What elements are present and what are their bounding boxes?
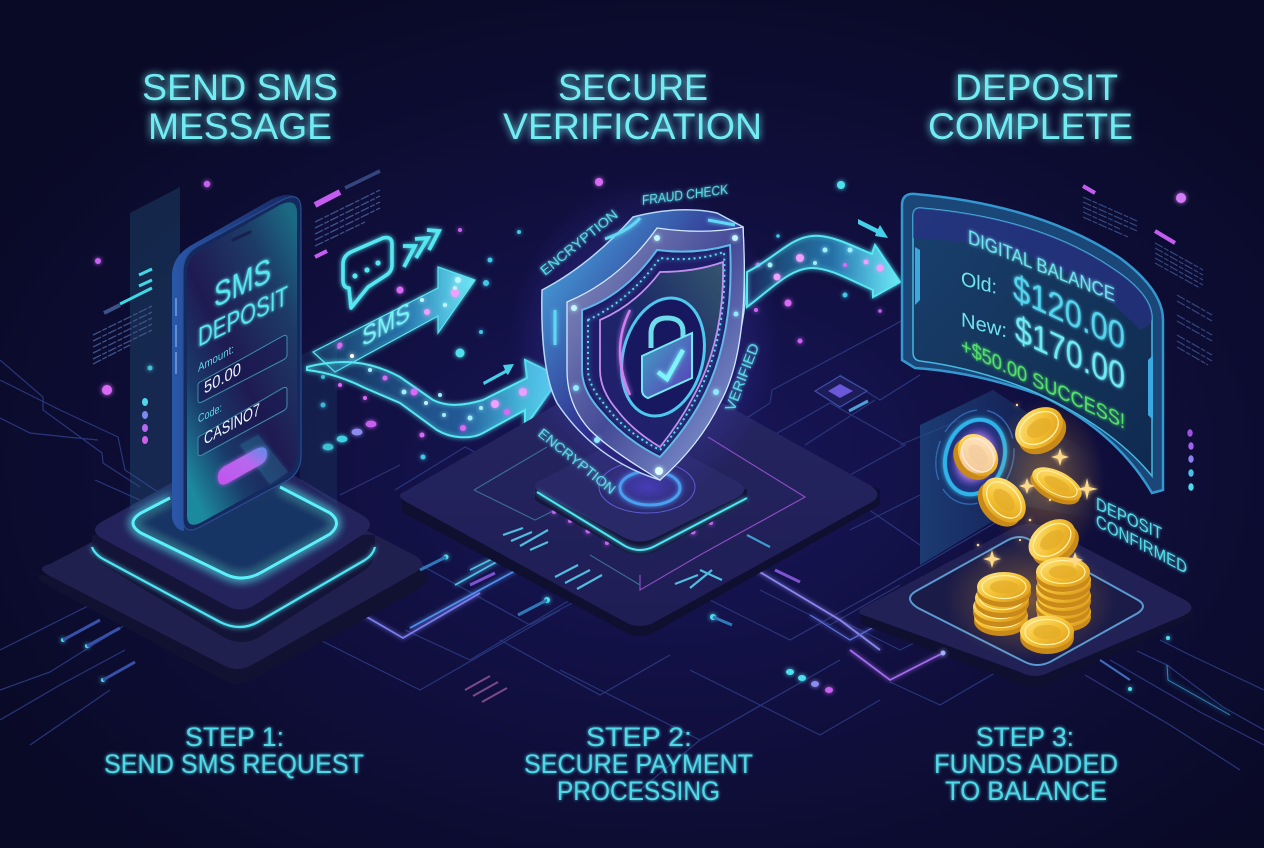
flow arrow to balance panel (747, 219, 900, 307)
old value: $120.00 (1013, 267, 1125, 359)
dotted rim (588, 252, 724, 450)
step 3 caption: STEP 3: (976, 722, 1074, 752)
platform: step 2 base (400, 364, 880, 636)
old label: Old: (961, 268, 997, 299)
panel title: DIGITAL BALANCE (968, 227, 1115, 307)
title: step 1 heading (142, 67, 338, 147)
title: step 1 heading: SEND SMS (142, 67, 338, 108)
coins (945, 399, 1115, 660)
phone heading DEPOSIT: DEPOSIT (198, 280, 288, 354)
falling coin 2 (1025, 460, 1087, 511)
step 1 caption (104, 722, 364, 779)
pseudo text and bars right of phone (315, 171, 380, 257)
title: step 3 heading: COMPLETE (928, 106, 1133, 147)
coin in portal (945, 426, 1007, 488)
shield label: verified: VERIFIED (722, 341, 763, 413)
amount field (198, 335, 287, 403)
shield sparkles (571, 235, 738, 475)
balance panel (902, 194, 1163, 493)
panel screen (913, 208, 1152, 476)
pseudo text and bars left of phone (93, 269, 152, 444)
pseudo text right of balance panel (1083, 186, 1212, 491)
step 3 caption: FUNDS ADDED (934, 749, 1118, 779)
phone (172, 195, 301, 531)
ring under shield (599, 461, 695, 513)
shield glass face (600, 262, 723, 447)
amount label: Amount: (198, 342, 234, 375)
falling coin 1 (1007, 399, 1074, 463)
phone side edge (172, 195, 301, 531)
shield label: encryption top: ENCRYPTION (537, 206, 621, 278)
step 3 caption (934, 722, 1118, 806)
chat bubble icon (343, 238, 392, 308)
title: step 1 heading: MESSAGE (148, 106, 332, 147)
status dots (142, 398, 148, 444)
step 2 caption: PROCESSING (557, 776, 720, 806)
shield label: encryption bottom: ENCRYPTION (535, 425, 619, 497)
portal rings (924, 400, 1026, 514)
step 2 caption (524, 722, 753, 806)
bright glowing circuit traces (360, 530, 1230, 715)
lock ring (610, 289, 716, 425)
deposit confirmed label: DEPOSIT (1096, 493, 1162, 544)
step 3 caption: TO BALANCE (945, 776, 1107, 806)
shield (510, 180, 780, 500)
coin stack left (973, 572, 1031, 636)
step 1 caption: SEND SMS REQUEST (104, 749, 364, 779)
speaker (233, 232, 250, 240)
lower cyan strip (92, 547, 375, 627)
holographic side panels behind phone (130, 187, 337, 510)
glowing ring (133, 487, 336, 578)
SMS arrow (313, 267, 475, 372)
shield inner rim (582, 245, 731, 457)
title: step 3 heading: DEPOSIT (955, 67, 1118, 108)
coin tray (910, 537, 1143, 665)
panel frame (902, 194, 1163, 493)
new label: New: (961, 309, 1007, 342)
platform: step 1 base (38, 449, 428, 684)
small arrow (483, 364, 514, 385)
lower circuit dots and bars (61, 554, 1170, 702)
shield back and side (542, 210, 745, 480)
amount value: 50.00 (204, 358, 241, 398)
code field (198, 387, 287, 456)
coin on tray (1020, 616, 1074, 654)
title: step 2 heading (503, 67, 762, 147)
arrow label: SMS (362, 296, 410, 353)
chip icon on the right of shield (815, 376, 868, 411)
code value: CASINO7 (204, 398, 260, 449)
new value: $170.00 (1015, 308, 1125, 399)
submit button (218, 447, 267, 485)
phone heading SMS: SMS (214, 250, 271, 316)
particles field (95, 178, 1186, 693)
title: step 2 heading: VERIFICATION (503, 106, 762, 147)
platform: step 3 base (859, 523, 1193, 688)
mid tier (535, 450, 747, 555)
phone screen (187, 202, 297, 525)
code label: Code: (198, 401, 222, 426)
coin stack right (1036, 557, 1091, 632)
status dots right (1187, 429, 1194, 491)
portal panel (920, 390, 1100, 565)
title: step 2 heading: SECURE (558, 67, 708, 108)
circuit lines background (0, 260, 1264, 790)
shield outer front (567, 227, 744, 480)
shield label: fraud check: FRAUD CHECK (642, 182, 728, 208)
step 2 caption: STEP 2: (586, 722, 692, 752)
sparkles (977, 404, 1098, 568)
header band (913, 208, 1152, 330)
falling coin 4 (1021, 511, 1087, 574)
chevrons icon (403, 230, 439, 267)
success value: +$50.00 SUCCESS! (961, 333, 1125, 434)
step 2 caption: SECURE PAYMENT (524, 749, 753, 779)
phone body (183, 197, 301, 530)
lower flow arrow to shield (307, 277, 560, 437)
title: step 3 heading (928, 67, 1133, 147)
deposit confirmed label: CONFIRMED (1096, 510, 1187, 578)
falling coin 3 (969, 469, 1035, 535)
circuit on platform (474, 437, 805, 590)
lock icon (642, 318, 692, 398)
deposit confirmed label (1096, 493, 1187, 578)
step 1 caption: STEP 1: (185, 722, 284, 752)
small arrow (858, 219, 888, 238)
